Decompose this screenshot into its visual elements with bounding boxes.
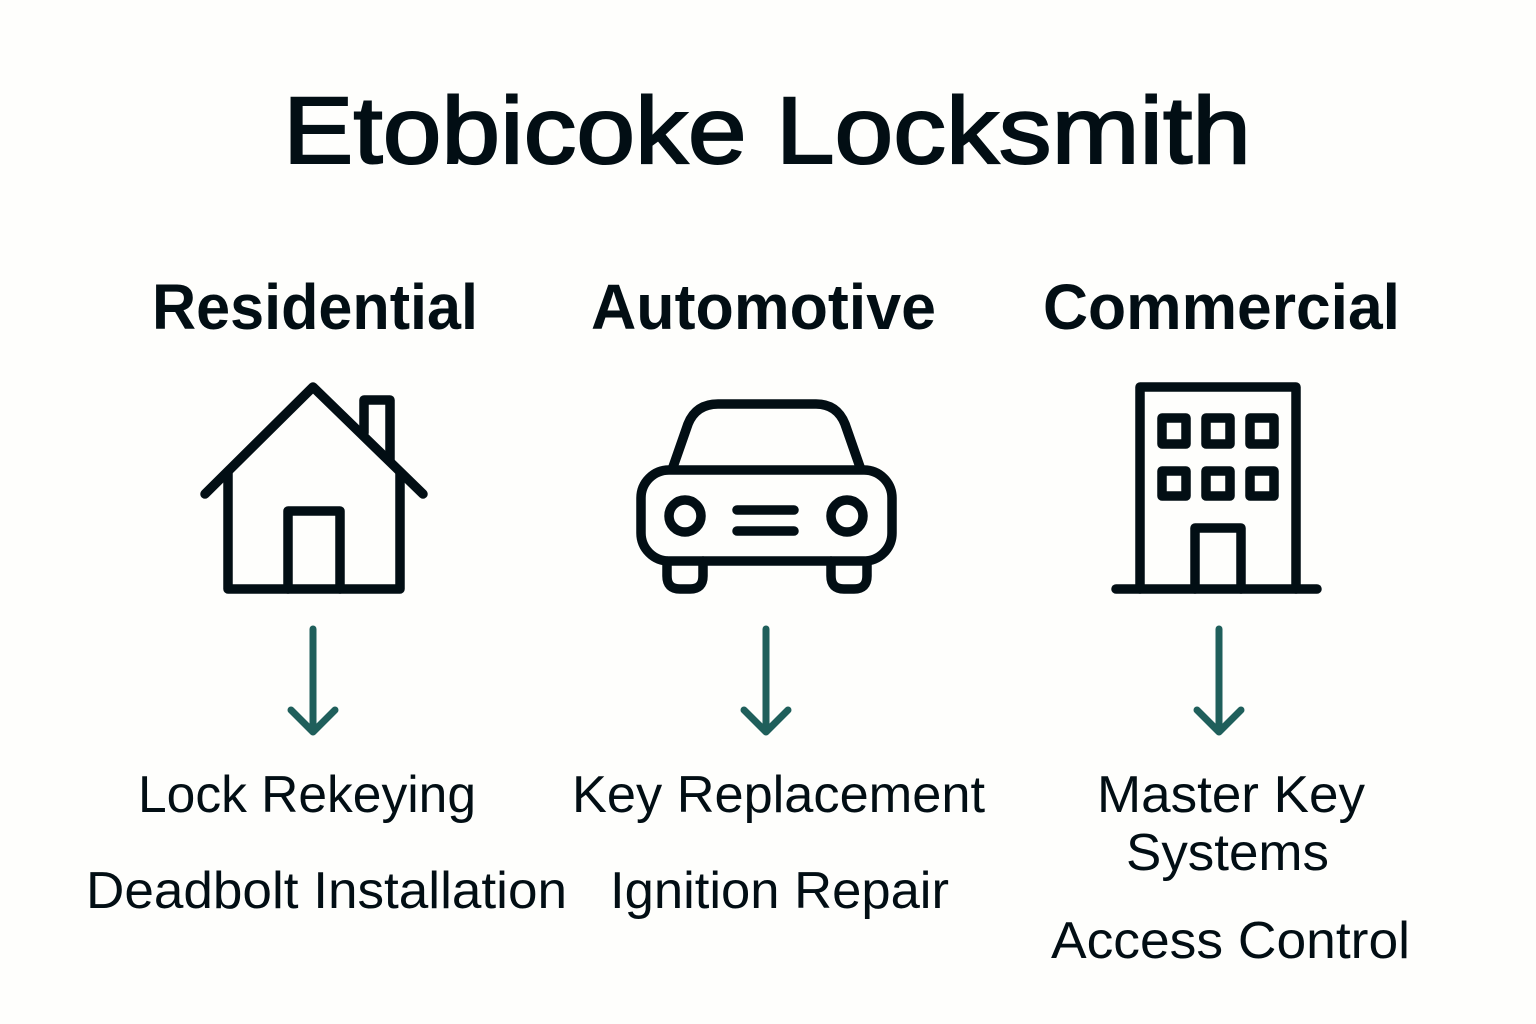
heading: automotive: Automotive (591, 271, 936, 343)
heading: commercial: Commercial (1043, 271, 1400, 343)
text: ignition repair: Ignition Repair (610, 862, 949, 920)
panel: automotive (572, 271, 986, 920)
icon: car (641, 404, 892, 589)
arrow: residential (291, 629, 335, 732)
panel: residential (86, 271, 567, 920)
title: Etobicoke Locksmith (283, 78, 1251, 184)
icon: house (205, 387, 423, 589)
panel: commercial (1043, 271, 1410, 970)
arrow: automotive (744, 629, 788, 732)
text: lock rekeying: Lock Rekeying (138, 766, 476, 824)
heading: residential: Residential (152, 271, 478, 343)
text: deadbolt installation: Deadbolt Installation (86, 862, 567, 920)
text: master key systems: Master Key (1097, 766, 1365, 824)
arrow: commercial (1197, 629, 1241, 732)
text: master key systems: Systems (1126, 824, 1329, 882)
text: master key systems (1097, 766, 1365, 882)
text: key replacement: Key Replacement (572, 766, 986, 824)
icon: office building (1116, 387, 1317, 589)
text: access control: Access Control (1051, 912, 1410, 970)
